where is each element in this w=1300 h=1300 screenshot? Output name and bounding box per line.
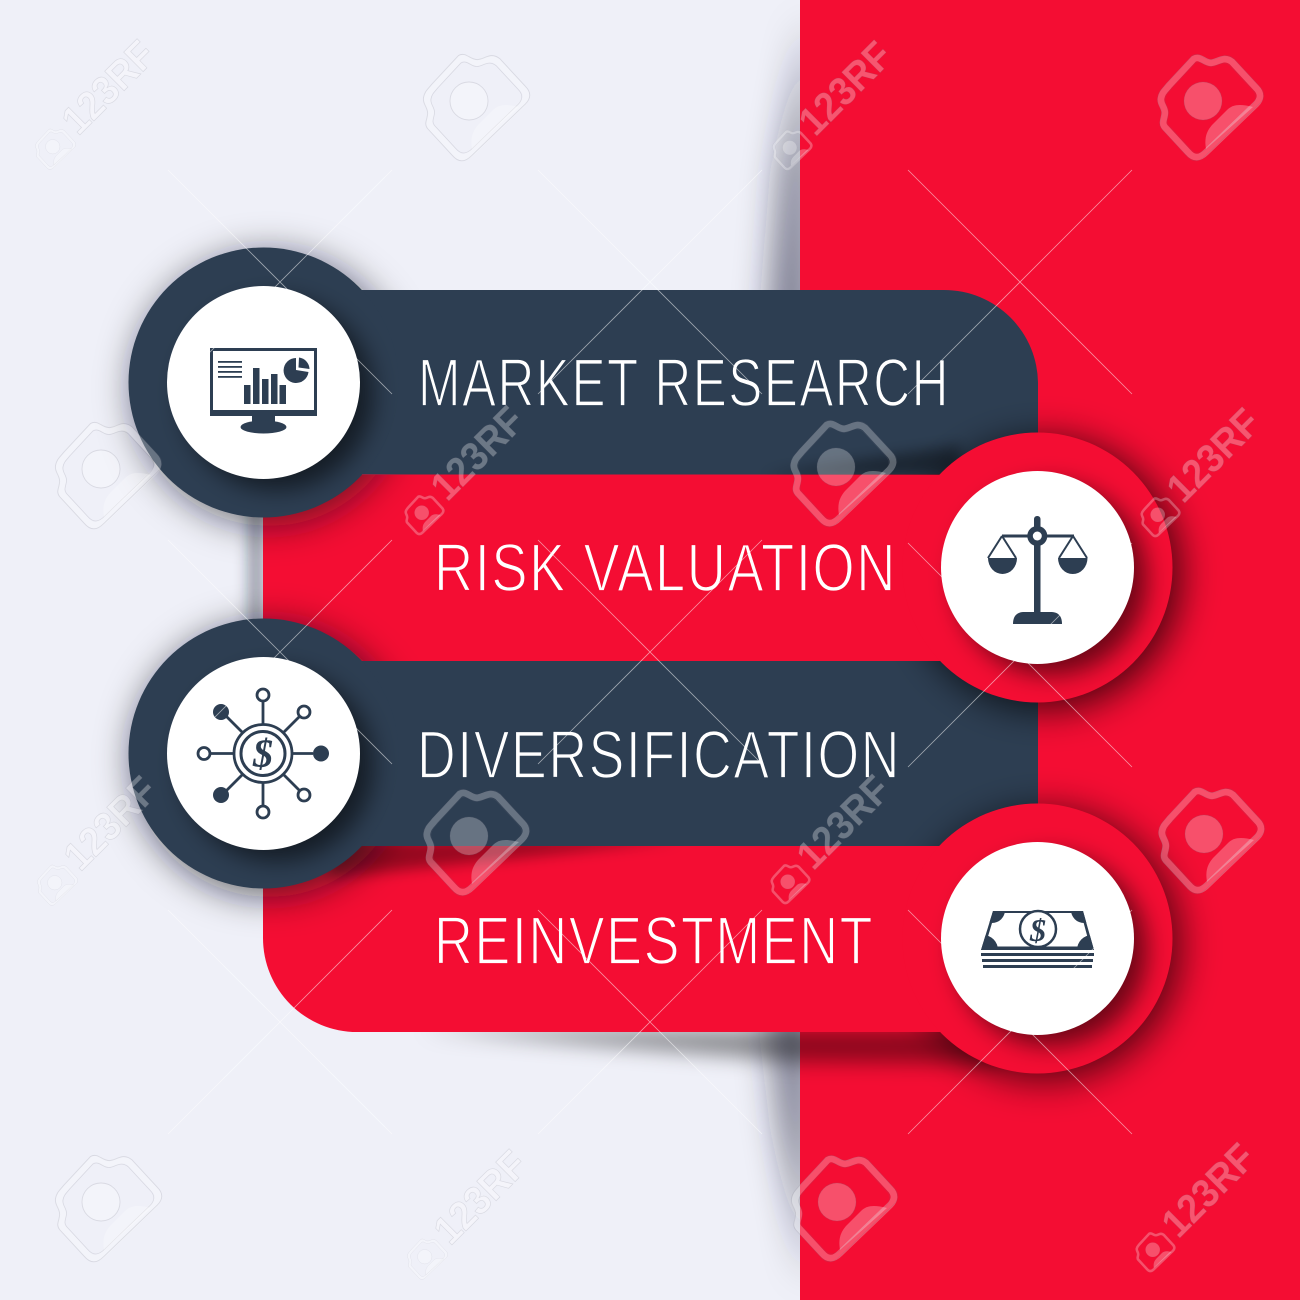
panel: red background: [800, 0, 1300, 1300]
watermark logos: 123RF: [56, 769, 166, 879]
step 2: risk valuation badge: [902, 432, 1172, 702]
band: diversification: [263, 661, 1038, 846]
seam shadow on market research band: [760, 445, 960, 475]
watermark logos: 123RF: [423, 399, 533, 509]
band: risk valuation: [263, 474, 1038, 661]
watermark logos: 123RF: [789, 768, 899, 878]
band: market research: [263, 290, 1038, 475]
watermark logos: 123RF: [426, 1143, 536, 1253]
heading: reinvestment: REINVESTMENT: [434, 903, 874, 979]
step 1: market research badge: [128, 248, 398, 518]
step 3: diversification badge: [128, 618, 398, 888]
step 4: reinvestment badge: [938, 804, 1172, 1074]
icon: dollar network: $: [252, 731, 273, 776]
watermark crosshair lines: [168, 170, 1132, 1134]
icon: balance scale: [988, 516, 1088, 624]
icon: monitor with charts: [210, 348, 317, 434]
watermark logos: 123RF: [791, 34, 901, 144]
watermark logos: 123RF: [1159, 401, 1269, 511]
seam shadow on reinvestment band: [330, 840, 680, 878]
band: reinvestment: [263, 846, 1038, 1032]
band bottom shadow: [420, 1030, 1000, 1064]
watermark logos: 123RF: [1154, 1136, 1264, 1246]
heading: market research: MARKET RESEARCH: [418, 345, 950, 421]
shadow cast by red panel: [772, 15, 810, 1285]
ring shadows: [132, 252, 1182, 1082]
icon: stack of banknotes: $: [1029, 912, 1046, 948]
heading: risk valuation: RISK VALUATION: [434, 530, 897, 606]
icon: stack of banknotes: [981, 910, 1094, 968]
watermark logos: 123RF: [54, 33, 164, 143]
icon: dollar network: [198, 689, 329, 818]
band 2 left shadow: [248, 505, 264, 630]
heading: diversification: DIVERSIFICATION: [417, 717, 901, 793]
